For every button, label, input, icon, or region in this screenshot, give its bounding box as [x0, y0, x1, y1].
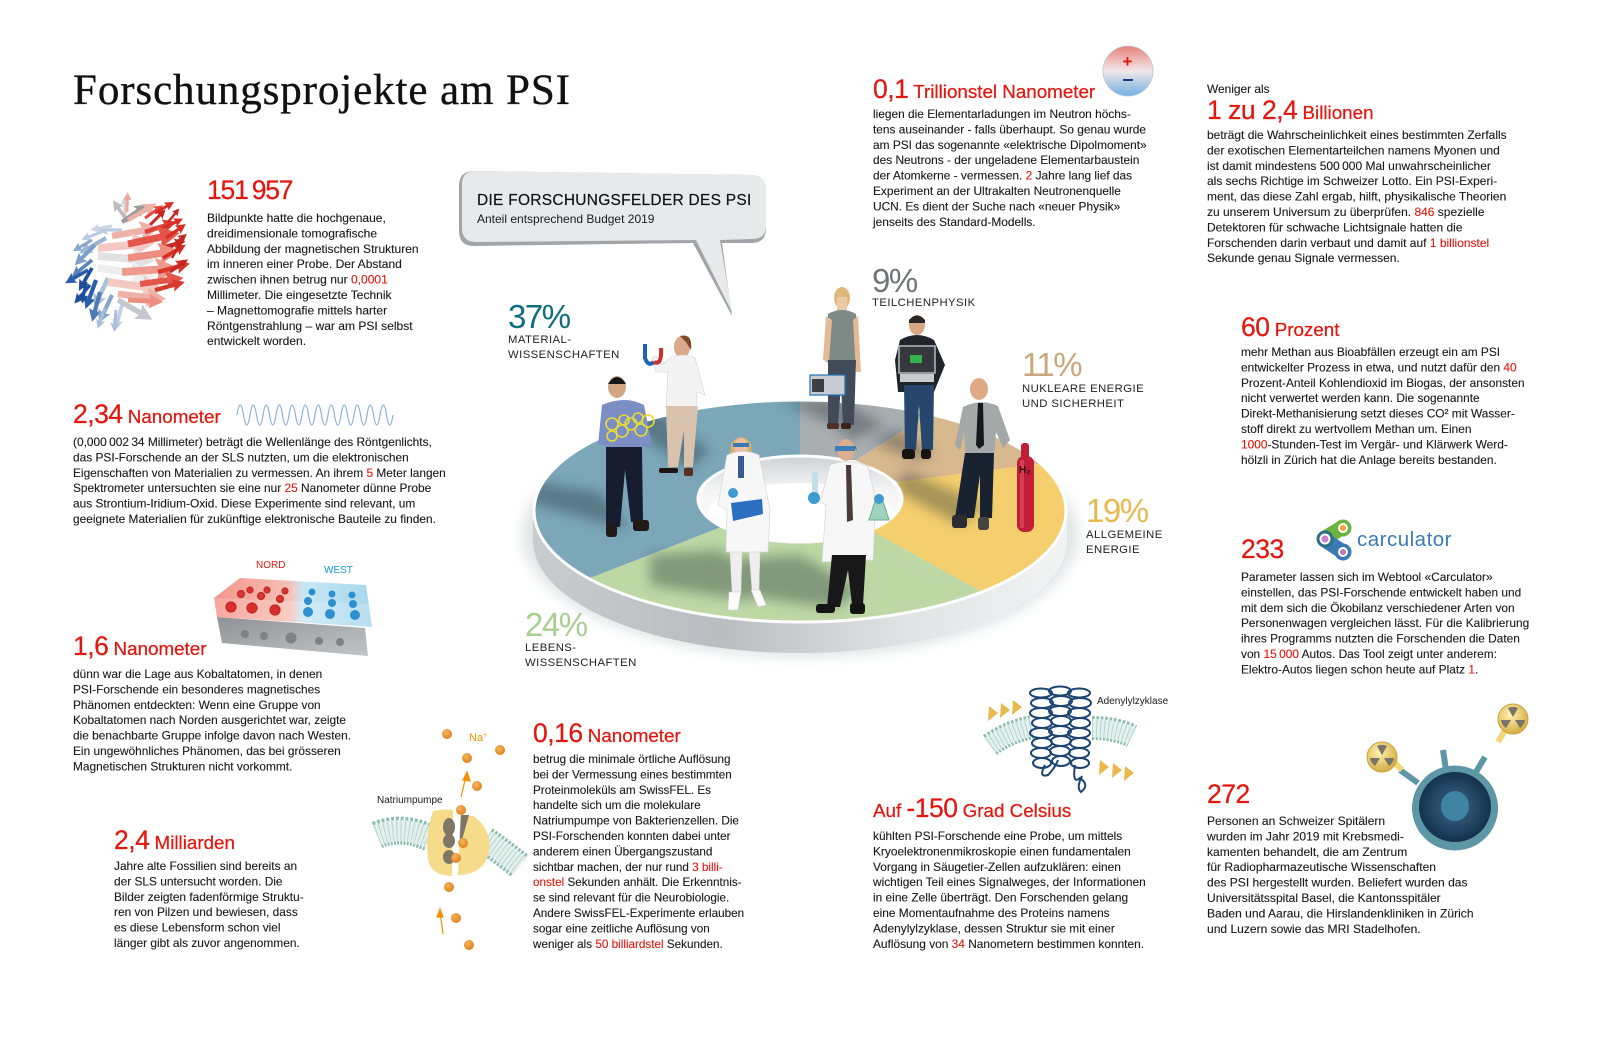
text block: Direkt-Methanisierung setzt dieses CO² mit Wasser-: [1241, 407, 1515, 421]
label: 37% Materialwissenschaften: 37%: [508, 298, 571, 335]
callout: Forschungsfelder: [459, 171, 766, 316]
text block: Detektoren für schwache Lichtsignale hatten die: [1207, 220, 1463, 234]
text block: weniger als 50 billiardstel Sekunden.: [533, 938, 723, 951]
text block: se sind relevant für die Neurobiologie.: [533, 892, 729, 905]
text block: ihres Programms nutzten die Forschenden die Daten: [1241, 632, 1520, 646]
text block: 1000-Stunden-Test im Vergär- und Klärwerk Werd-: [1241, 437, 1508, 451]
cast shadows: [520, 400, 985, 608]
label: 19% Allgemeine Energie: [1086, 492, 1163, 556]
icon: adenylylzyklase: [988, 686, 1134, 792]
person: woman with case: [810, 287, 861, 429]
title: Forschungsprojekte am PSI: [73, 67, 571, 114]
text block: Magnetischen Strukturen nicht vorkommt.: [73, 759, 292, 773]
panel: 272: [1206, 704, 1528, 936]
text block: wurden im Jahr 2019 mit Krebsmedi-: [1206, 829, 1404, 843]
text block: von 15 000 Autos. Das Tool zeigt unter anderem:: [1241, 647, 1497, 661]
text block: aus Strontium-Iridium-Oxid. Diese Experimente sind relevant, um: [73, 497, 415, 511]
panel: 2,4 Milliarden: [114, 825, 304, 950]
text block: nicht verwertet werden kann. Die sogenannte: [1241, 391, 1480, 405]
heading: 1,6 Nanometer: [73, 631, 206, 661]
label: NORD: NORD: [256, 560, 285, 571]
text block: zwischen ihnen betrug nur 0,0001: [207, 273, 388, 287]
icon: wave: [237, 405, 393, 425]
text block: Röntgenstrahlung – war am PSI selbst: [207, 319, 413, 333]
icon: carculator logo: carculator: [1357, 528, 1452, 551]
text block: Elektro-Autos liegen schon heute auf Platz 1.: [1241, 662, 1478, 676]
panel: 0,16 Nanometer: [377, 718, 744, 951]
text block: zu unserem Universum zu überprüfen. 846 spezielle: [1207, 205, 1484, 219]
heading: 272: [1207, 779, 1250, 809]
text block: Spektrometer untersuchten sie eine nur 25 Nanometer dünne Probe: [73, 481, 431, 495]
text block: Kryoelektronenmikroskopie einen fundamentalen: [873, 844, 1131, 858]
text block: ist damit mindestens 500 000 Mal unwahrscheinlicher: [1207, 159, 1491, 173]
text block: sichtbar machen, der nur rund 3 billi-: [533, 861, 723, 874]
text block: Andere SwissFEL-Experimente erlauben: [533, 907, 744, 920]
text block: Bildpunkte hatte die hochgenaue,: [207, 211, 386, 225]
label: 24% Lebenswissenschaften: [525, 606, 637, 669]
text block: PSI-Forschenden konnten dabei unter: [533, 830, 731, 843]
callout subtitle: Anteil entsprechend Budget 2019: [477, 212, 655, 226]
text block: onstel Sekunden anhält. Die Erkenntnis-: [533, 876, 742, 889]
text block: für Radiopharmazeutische Wissenschaften: [1207, 860, 1436, 874]
label: Adenylylzyklase: Adenylylzyklase: [1097, 696, 1169, 707]
text block: Personen an Schweizer Spitälern: [1207, 814, 1385, 828]
text block: Proteinmoleküls am SwissFEL. Es: [533, 784, 711, 797]
text block: ment, das diese Zahl ergab, hilft, physikalische Theorien: [1207, 190, 1506, 204]
label: 9% Teilchenphysik: 9%: [872, 262, 918, 299]
label: Na+: +: [483, 732, 487, 739]
heading: 2,34 Nanometer: [73, 399, 221, 429]
panel: 1 zu 2,4 Billionen: [1207, 82, 1507, 265]
text block: tens auseinander - falls überhaupt. So genau wurde: [873, 122, 1146, 136]
text block: Vorgang in Säugetier-Zellen aufzuklären: einen: [873, 860, 1121, 874]
label: 37% Materialwissenschaften: MATERIAL-: [508, 334, 571, 346]
text block: entwickelt worden.: [207, 334, 306, 348]
heading: 1 zu 2,4 Billionen: [1207, 95, 1374, 125]
text block: Personenwagen vergleichen lässt. Für die Kalibrierung: [1241, 616, 1529, 630]
heading: Auf -150 Grad Celsius: [873, 793, 1071, 823]
text block: Auflösung von 34 Nanometern bestimmen konnten.: [873, 937, 1144, 951]
text block: Phänomen entdeckten: Wenn eine Gruppe von: [73, 698, 321, 712]
text block: länger gibt als zuvor angenommen.: [114, 936, 300, 950]
label: 37% Materialwissenschaften: [508, 298, 620, 361]
label: 19% Allgemeine Energie: ALLGEMEINE: [1086, 529, 1163, 541]
text block: eine Momentaufnahme des Proteins namens: [873, 906, 1110, 920]
label: 24% Lebenswissenschaften: WISSENSCHAFTEN: [525, 657, 637, 669]
label: 37% Materialwissenschaften: WISSENSCHAFTEN: [508, 349, 620, 361]
icon: dipole sphere: +: [1122, 52, 1132, 71]
callout title: DIE FORSCHUNGSFELDER DES PSI: [477, 192, 752, 209]
panel: 2,34 Nanometer: [73, 399, 446, 526]
text block: hölzli in Zürich hat die Anlage bereits bestanden.: [1241, 453, 1497, 467]
text block: jenseits des Standard-Modells.: [872, 215, 1036, 229]
text block: stoff direkt zu wertvollem Methan um. Einen: [1241, 422, 1471, 436]
person: woman in lab coat: [718, 437, 770, 610]
text block: Forschenden darin verbaut und damit auf 1 billionstel: [1207, 236, 1489, 250]
text block: (0,000 002 34 Millimeter) beträgt die Wellenlänge des Röntgenlichts,: [73, 435, 432, 449]
icon: hydrogen cylinder: H₂: [1019, 465, 1031, 476]
text block: am PSI das sogenannte «elektrische Dipolmoment»: [873, 138, 1147, 152]
text block: kamenten behandelt, die am Zentrum: [1207, 845, 1407, 859]
text block: Prozent-Anteil Kohlendioxid im Biogas, der ansonsten: [1241, 376, 1525, 390]
text block: des Neutrons - der ungeladene Elementarbaustein: [873, 153, 1139, 167]
text block: und Luzern sowie das MRI Stadelhofen.: [1207, 922, 1421, 936]
label: 24% Lebenswissenschaften: LEBENS-: [525, 642, 576, 654]
text block: der Atomkerne - vermessen. 2 Jahre lang lief das: [873, 169, 1132, 183]
heading: 151 957: [207, 175, 293, 205]
text block: Adenylylzyklase, dessen Struktur sie mit einer: [873, 921, 1115, 935]
panel: Auf -150 Grad Celsius: [872, 686, 1169, 951]
text block: als sechs Richtige im Schweizer Lotto. Ein PSI-Experi-: [1207, 174, 1497, 188]
panel: 151 957: [62, 175, 419, 348]
intro: Weniger als: [1207, 82, 1270, 96]
icon: magnetic arrow sphere: [62, 192, 192, 332]
person: man with blue shirt holding lattice: [598, 376, 654, 537]
text block: ren von Pilzen und bewiesen, dass: [114, 905, 298, 919]
text block: mit dem sich die Ökobilanz verschiedener Arten von: [1241, 601, 1515, 615]
text block: Millimeter. Die eingesetzte Technik: [207, 288, 393, 302]
icon: carculator logo: [1316, 520, 1452, 560]
text block: das PSI-Forschende an der SLS nutzten, um die elektronischen: [73, 450, 409, 464]
text block: liegen die Elementarladungen im Neutron höchs-: [873, 107, 1131, 121]
panel: 233 Carculator: [1241, 520, 1529, 676]
text block: Natriumpumpe von Bakterienzellen. Die: [533, 815, 739, 828]
icon: dipole sphere: [1103, 46, 1153, 96]
text block: geeignete Materialien für zukünftige elektronische Bauteile zu finden.: [73, 512, 436, 526]
text block: beträgt die Wahrscheinlichkeit eines bestimmten Zerfalls: [1207, 128, 1507, 142]
text block: sogar eine zeitliche Auflösung von: [533, 922, 710, 935]
label: 9% Teilchenphysik: [872, 262, 976, 309]
text block: mehr Methan aus Bioabfällen erzeugt ein am PSI: [1241, 345, 1500, 359]
panel: 0,1 Trillionstel Nanometer: [872, 46, 1153, 229]
text block: handelte sich um die molekulare: [533, 799, 701, 812]
text block: PSI-Forschende ein besonderes magnetisches: [73, 682, 320, 696]
person: woman with magnet: [645, 336, 705, 476]
person: man with laptop: [895, 315, 945, 459]
label: 19% Allgemeine Energie: ENERGIE: [1086, 544, 1140, 556]
text block: UCN. Es dient der Suche nach «neuer Physik»: [873, 199, 1121, 213]
heading: 60 Prozent: [1241, 312, 1340, 342]
panel: 60 Prozent: [1241, 312, 1525, 467]
label: 11% Nukleare Energie und Sicherheit: NUKLEARE ENERGIE: [1022, 383, 1144, 395]
text block: Baden und Aarau, die Hirslandenkliniken in Zürich: [1207, 906, 1474, 920]
person: man in lab coat: [808, 439, 889, 614]
text block: dünn war die Lage aus Kobaltatomen, in denen: [73, 667, 322, 681]
text block: Abbildung der magnetischen Strukturen: [207, 242, 419, 256]
text block: Kobaltatomen nach Norden ausgerichtet war, zeigte: [73, 713, 346, 727]
text block: die benachbarte Gruppe infolge davon nach Westen.: [73, 729, 351, 743]
text block: bei der Vermessung eines bestimmten: [533, 768, 732, 781]
text block: der SLS untersucht worden. Die: [114, 874, 283, 888]
text block: in eine Zelle überträgt. Den Forschenden gelang: [873, 891, 1128, 905]
panel: 1,6 Nanometer: [73, 560, 372, 773]
label: Na+: Na: [469, 732, 483, 744]
text block: kühlten PSI-Forschende eine Probe, um mittels: [873, 829, 1122, 843]
text block: Jahre alte Fossilien sind bereits an: [114, 859, 297, 873]
label: 24% Lebenswissenschaften: 24%: [525, 606, 588, 643]
text block: dreidimensionale tomografische: [207, 226, 377, 240]
text block: Experiment an der Ultrakalten Neutronenquelle: [873, 184, 1121, 198]
text block: Sekunde genau Signale vermessen.: [1207, 251, 1400, 265]
label: 11% Nukleare Energie und Sicherheit: UND SICHERHEIT: [1022, 398, 1124, 410]
pie chart: research fields: [518, 402, 1082, 660]
label: 9% Teilchenphysik: TEILCHENPHYSIK: [872, 297, 976, 309]
text block: des PSI hergestellt wurden. Beliefert wurden das: [1207, 876, 1468, 890]
icon: cell with radiopharmaceuticals: [1367, 704, 1528, 850]
icon: magnetic layer block: [214, 578, 372, 656]
text block: es diese Lebensform schon viel: [114, 921, 281, 935]
heading: 233: [1241, 534, 1284, 564]
person: man with tie: [952, 378, 1010, 530]
text block: anderem einen Übergangszustand: [533, 845, 712, 858]
text block: der exotischen Elementarteilchen namens Myonen und: [1207, 143, 1500, 157]
text block: Bilder zeigten fadenförmige Struktu-: [114, 890, 304, 904]
heading: 2,4 Milliarden: [114, 825, 235, 855]
text block: wichtigen Teil eines Signalweges, der Informationen: [872, 875, 1146, 889]
label: 11% Nukleare Energie und Sicherheit: 11%: [1022, 346, 1082, 383]
icon: sodium pump: [377, 729, 520, 950]
text block: betrug die minimale örtliche Auflösung: [533, 753, 730, 766]
label: 11% Nukleare Energie und Sicherheit: [1022, 346, 1144, 410]
centre hole: [698, 456, 902, 543]
heading: 0,1 Trillionstel Nanometer: [873, 74, 1095, 104]
heading: 0,16 Nanometer: [533, 718, 681, 748]
text block: einstellen, das PSI-Forschende entwickelt haben und: [1241, 585, 1521, 599]
text block: Parameter lassen sich im Webtool «Carculator»: [1241, 570, 1493, 584]
text block: entwickelter Prozess in etwa, und nutzt dafür den 40: [1241, 360, 1517, 374]
text block: Ein ungewöhnliches Phänomen, das bei grösseren: [73, 744, 341, 758]
text block: Universitätsspital Basel, die Kantonsspitäler: [1207, 891, 1441, 905]
text block: Eigenschaften von Materialien zu vermessen. An ihrem 5 Meter langen: [73, 466, 446, 480]
icon: hydrogen cylinder: [1017, 443, 1034, 532]
label: 19% Allgemeine Energie: 19%: [1086, 492, 1149, 529]
label: Natriumpumpe: Natriumpumpe: [377, 795, 443, 806]
label: WEST: WEST: [324, 565, 353, 576]
text block: – Magnettomografie mittels harter: [207, 303, 387, 317]
text block: im inneren einer Probe. Der Abstand: [207, 257, 402, 271]
